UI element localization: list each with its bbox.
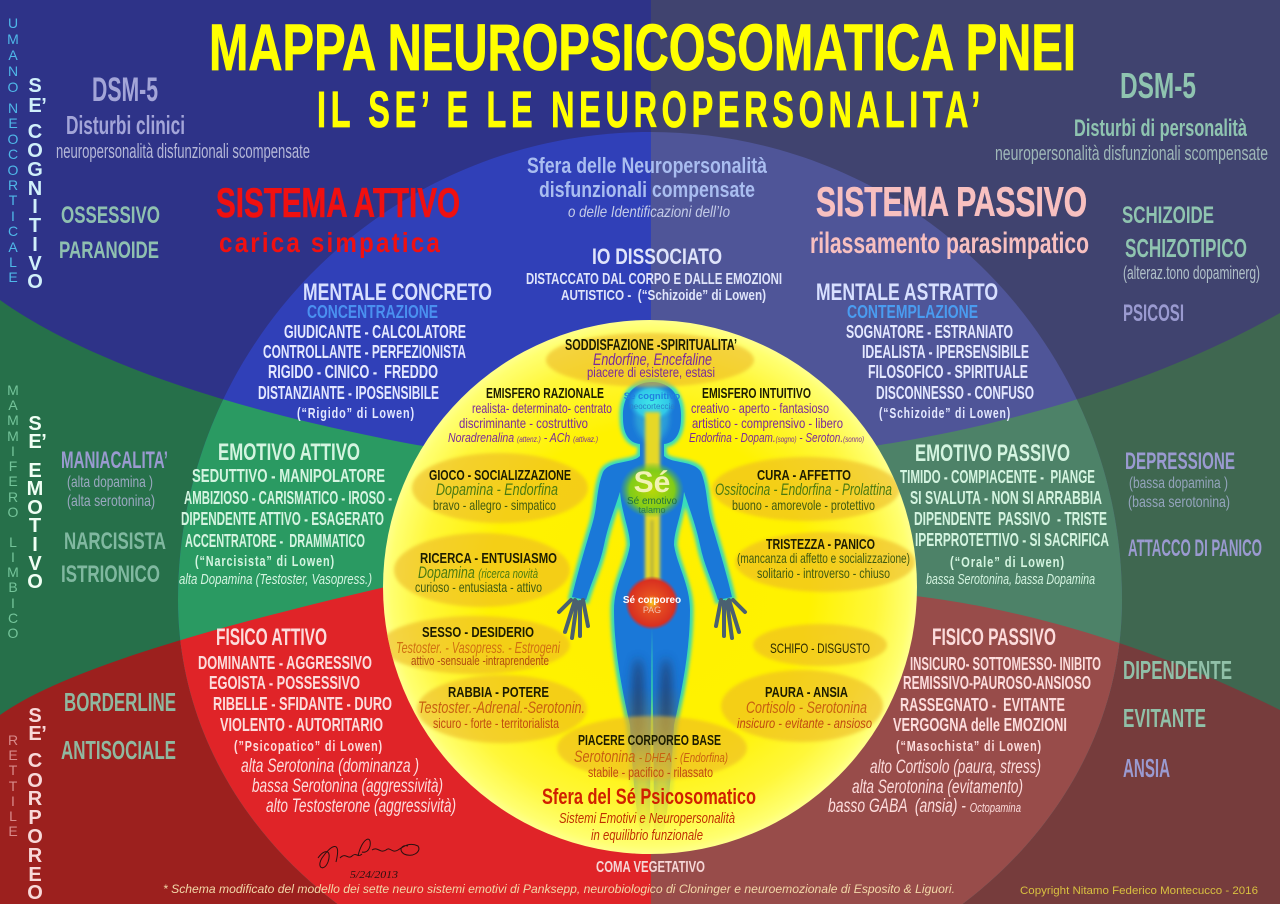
panel: emotional passive: DIPENDENTE PASSIVO - TRISTE — [914, 509, 1107, 529]
panel: mental concrete: GIUDICANTE - CALCOLATORE — [284, 322, 466, 342]
panel: emotional passive: (“Orale” di Lowen) — [950, 554, 1065, 571]
ellipse text: care: CURA - AFFETTO — [757, 467, 851, 484]
heading: sphere of neuropersonalities: Sfera delle Neuropersonalità — [527, 153, 768, 178]
centre labels: PAG — [643, 605, 661, 615]
text block: rational hemisphere: realista- determinato- centrato — [472, 400, 612, 416]
panel: emotional active: SEDUTTIVO - MANIPOLATORE — [192, 466, 385, 486]
ellipse text: care: Ossitocina - Endorfina - Prolattina — [715, 480, 892, 499]
panel: mental abstract — [816, 279, 1034, 422]
ellipse text: basic bodily pleasure: PIACERE CORPOREO BASE — [578, 732, 721, 749]
ellipse text: seeking — [415, 550, 557, 595]
text block: intuitive hemisphere: EMISFERO INTUITIVO — [702, 385, 811, 402]
heading: sphere of the psychosomatic self: in equilibrio funzionale — [591, 827, 703, 844]
centre labels: Sé — [634, 466, 670, 499]
signature — [318, 839, 419, 881]
vertical label: emotional self — [7, 382, 47, 641]
centre labels: Sé cognitivo — [624, 391, 680, 402]
panel: physical active: VIOLENTO - AUTORITARIO — [220, 715, 383, 735]
heading: sphere of neuropersonalities: o delle Identificazioni dell’Io — [568, 204, 730, 221]
panel: sphere of dysfunctional neuropersonalities — [178, 132, 1122, 904]
list: cognitive personality disorders: PSICOSI — [1123, 300, 1184, 327]
ellipse text: sadness: solitario - introverso - chiuso — [757, 565, 890, 581]
text block: dissociated self — [526, 244, 782, 304]
list: emotional clinical disorders: NARCISISTA — [64, 528, 166, 555]
panel: clinical disorders heading: DSM-5 — [92, 71, 158, 109]
panel: physical passive: (“Masochista” di Lowen) — [896, 738, 1042, 755]
ellipse text: sadness — [737, 536, 910, 581]
list: physical clinical disorders: BORDERLINE — [64, 687, 176, 717]
heading: sphere of the psychosomatic self: Sfera del Sé Psicosomatico — [542, 784, 756, 809]
ellipse text: fear: insicuro - evitante - ansioso — [737, 715, 872, 731]
ellipse text: seeking: RICERCA - ENTUSIASMO — [420, 550, 557, 567]
panel: physical active: DOMINANTE - AGGRESSIVO — [198, 653, 372, 673]
ellipse text: satisfaction: Endorfine, Encefaline — [593, 350, 712, 369]
panel: physical active: (”Psicopatico” di Lowen) — [234, 738, 383, 755]
panel: clinical disorders heading: Disturbi clinici — [66, 110, 185, 140]
title — [209, 10, 1076, 138]
list: emotional clinical disorders — [61, 447, 168, 588]
list: physical personality disorders: ANSIA — [1123, 753, 1170, 783]
panel: physical active: FISICO ATTIVO — [216, 624, 327, 651]
ellipse text: play: GIOCO - SOCIALIZZAZIONE — [429, 467, 571, 484]
heading: active system: carica simpatica — [219, 227, 442, 258]
panel: mental concrete: (“Rigido” di Lowen) — [297, 405, 415, 422]
list: emotional personality disorders — [1125, 448, 1262, 562]
text block: intuitive hemisphere: artistico - comprensivo - libero — [692, 415, 843, 431]
text block: intuitive hemisphere: Endorfina - Dopam.(sogno) - Seroton.(sonno) — [689, 430, 864, 445]
ellipse text: sex: attivo -sensuale -intraprendente — [411, 653, 549, 668]
panel: mental abstract: MENTALE ASTRATTO — [816, 279, 998, 306]
heading: sphere of the psychosomatic self — [542, 784, 756, 844]
ellipse text: seeking: Dopamina (ricerca novità — [418, 563, 538, 582]
panel: emotional active — [179, 439, 392, 588]
panel: mental concrete: MENTALE CONCRETO — [303, 279, 492, 306]
list: emotional clinical disorders: (alta serotonina) — [67, 493, 155, 510]
ellipse text: fear: PAURA - ANSIA — [765, 684, 848, 701]
ellipse text: care — [715, 467, 892, 513]
copyright: Copyright Nitamo Federico Montecucco - 2016 — [1020, 885, 1258, 897]
panel: mental concrete: RIGIDO - CINICO - FREDDO — [268, 362, 438, 382]
panel: personality disorders heading — [995, 65, 1268, 165]
ellipse text: satisfaction: SODDISFAZIONE -SPIRITUALITA’ — [565, 337, 737, 354]
text block: dissociated self: AUTISTICO - (“Schizoide” di Lowen) — [561, 287, 766, 304]
text block: dissociated self: IO DISSOCIATO — [592, 244, 722, 269]
vertical label: emotional self: SE’ EMOTIVO — [27, 413, 47, 593]
panel: physical passive: VERGOGNA delle EMOZIONI — [893, 715, 1067, 735]
text block: rational hemisphere: EMISFERO RAZIONALE — [486, 385, 604, 402]
text block: dissociated self: DISTACCATO DAL CORPO E DALLE EMOZIONI — [526, 271, 782, 288]
panel: emotional passive: SI SVALUTA - NON SI ARRABBIA — [910, 488, 1102, 508]
panel: clinical disorders heading: neuropersonalità disfunzionali scompensate — [56, 141, 310, 163]
ellipse text: basic bodily pleasure: stabile - pacifico - rilassato — [588, 764, 713, 780]
ellipse text: fear — [737, 684, 872, 731]
list: physical clinical disorders — [61, 687, 176, 765]
list: cognitive clinical disorders — [59, 202, 160, 264]
ellipse text: play — [429, 467, 571, 513]
list: emotional clinical disorders: (alta dopamina ) — [67, 474, 153, 491]
ellipse text: care: buono - amorevole - protettivo — [732, 497, 875, 513]
ellipse text: sadness: TRISTEZZA - PANICO — [766, 536, 875, 553]
heading: active system — [216, 179, 460, 258]
label: vegetative coma: COMA VEGETATIVO — [596, 859, 705, 876]
panel: mental concrete — [258, 279, 492, 422]
list: physical personality disorders — [1123, 655, 1232, 783]
ellipse text: sex: SESSO - DESIDERIO — [422, 624, 534, 641]
text block: intuitive hemisphere: creativo - aperto - fantasioso — [691, 400, 829, 416]
centre labels: neocorteccia — [629, 402, 675, 411]
panel: emotional active: EMOTIVO ATTIVO — [218, 439, 360, 466]
ellipse text: basic bodily pleasure: Serotonina - DHEA - (Endorfina) — [574, 747, 728, 766]
vertical label: bodily self: SE’ CORPOREO — [27, 705, 47, 904]
panel: physical passive: basso GABA (ansia) - Octopamina — [828, 796, 1021, 817]
panel: mental abstract: CONTEMPLAZIONE — [847, 302, 978, 322]
list: emotional personality disorders: (bassa serotonina) — [1128, 494, 1230, 511]
panel: physical active — [198, 624, 456, 817]
panel: mental concrete: CONCENTRAZIONE — [307, 302, 438, 322]
ellipse text: anger: Testoster.-Adrenal.-Serotonin. — [418, 698, 585, 717]
heading: active system: SISTEMA ATTIVO — [216, 179, 460, 226]
panel: physical passive — [828, 624, 1101, 817]
heading: passive system — [810, 178, 1089, 260]
list: emotional clinical disorders: ISTRIONICO — [61, 561, 160, 588]
panel: mental abstract: DISCONNESSO - CONFUSO — [876, 383, 1034, 403]
list: physical clinical disorders: ANTISOCIALE — [61, 735, 176, 765]
heading: sphere of neuropersonalities: disfunzionali compensate — [539, 177, 755, 202]
text block: rational hemisphere: Noradrenalina (attenz.) - ACh (attivaz.) — [448, 430, 598, 445]
panel: physical passive: alta Serotonina (evitamento) — [852, 777, 1023, 798]
ellipse text: anger: RABBIA - POTERE — [448, 684, 549, 701]
heading: sphere of the psychosomatic self: Sistemi Emotivi e Neuropersonalità — [559, 810, 735, 827]
panel: physical active: bassa Serotonina (aggressività) — [252, 776, 443, 797]
ellipse text: play: bravo - allegro - simpatico — [433, 497, 556, 513]
centre labels: talamo — [638, 505, 666, 515]
panel: physical active: alta Serotonina (dominanza ) — [241, 756, 419, 777]
footnote: * Schema modificato del modello dei sette neuro sistemi emotivi di Panksepp, neurobiologico di Cloninger e neuroemozionale di Esposito & Liguori. — [163, 882, 955, 896]
list: cognitive clinical disorders: OSSESSIVO — [61, 202, 160, 229]
ellipse text: sex: Testoster. - Vasopress. - Estrogeni — [396, 640, 560, 657]
panel: emotional passive: IPERPROTETTIVO - SI SACRIFICA — [915, 530, 1109, 550]
panel: emotional active: (“Narcisista” di Lowen) — [195, 553, 335, 570]
centre labels: Sé emotivo — [627, 496, 677, 507]
list: cognitive personality disorders — [1122, 202, 1260, 327]
vertical label: emotional self: MAMMIFERO LIMBICO — [7, 382, 19, 641]
ellipse text: anger — [418, 684, 585, 731]
list: emotional clinical disorders: MANIACALITA’ — [61, 447, 168, 474]
ellipse text: satisfaction — [565, 337, 737, 380]
panel: physical passive: REMISSIVO-PAUROSO-ANSIOSO — [903, 673, 1091, 693]
panel: physical active: RIBELLE - SFIDANTE - DURO — [213, 694, 392, 714]
panel: physical active: EGOISTA - POSSESSIVO — [209, 673, 360, 693]
panel: physical active: alto Testosterone (aggressività) — [266, 796, 456, 817]
panel: mental concrete: DISTANZIANTE - IPOSENSIBILE — [258, 383, 439, 403]
panel: physical passive: RASSEGNATO - EVITANTE — [900, 695, 1065, 715]
panel: personality disorders heading: DSM-5 — [1120, 65, 1196, 106]
panel: emotional active: alta Dopamina (Testoster, Vasopress.) — [179, 571, 372, 588]
figure body — [572, 382, 732, 830]
ellipse text: sex — [396, 624, 560, 668]
ellipse text: disgust: SCHIFO - DISGUSTO — [770, 640, 870, 656]
panel: emotional active: ACCENTRATORE - DRAMMATICO — [185, 531, 365, 551]
panel: mental abstract: (“Schizoide” di Lowen) — [879, 405, 1011, 422]
list: physical personality disorders: EVITANTE — [1123, 703, 1206, 733]
vertical label: bodily self: RETTILE — [8, 732, 18, 839]
ellipse text: seeking: curioso - entusiasta - attivo — [415, 579, 542, 595]
vertical label: cognitive self — [7, 15, 47, 293]
list: cognitive personality disorders: SCHIZOIDE — [1122, 202, 1214, 229]
signature: 5/24/2013 — [350, 869, 399, 881]
text block: intuitive hemisphere — [689, 385, 864, 445]
vertical label: bodily self — [8, 705, 47, 904]
panel: mental concrete: CONTROLLANTE - PERFEZIONISTA — [263, 342, 466, 362]
root centre — [625, 576, 679, 630]
panel: emotional passive: bassa Serotonina, bassa Dopamina — [926, 571, 1095, 588]
panel: emotional passive: EMOTIVO PASSIVO — [915, 440, 1070, 467]
crown glow — [628, 383, 676, 423]
list: emotional personality disorders: (bassa dopamina ) — [1129, 475, 1228, 492]
ellipse text: satisfaction: piacere di esistere, estasi — [587, 364, 715, 380]
panel: emotional active: DIPENDENTE ATTIVO - ESAGERATO — [181, 509, 384, 529]
emotion ellipses — [380, 333, 915, 780]
list: cognitive clinical disorders: PARANOIDE — [59, 237, 159, 264]
leg shading — [632, 658, 672, 742]
ellipse text: anger: sicuro - forte - territorialista — [433, 715, 559, 731]
panel: physical passive: INSICURO- SOTTOMESSO- INIBITO — [910, 654, 1101, 674]
ellipse text: play: Dopamina - Endorfina — [436, 480, 558, 499]
panel: sphere of the psychosomatic self — [383, 320, 917, 854]
text block: rational hemisphere — [448, 385, 612, 445]
vertical label: cognitive self: SE’ COGNITIVO — [27, 75, 47, 293]
panel: mental abstract: FILOSOFICO - SPIRITUALE — [868, 362, 1028, 382]
ellipse text: fear: Cortisolo - Serotonina — [746, 698, 867, 717]
panel: physical passive: alto Cortisolo (paura, stress) — [870, 757, 1041, 778]
panel: physical passive: FISICO PASSIVO — [932, 624, 1056, 651]
text block: rational hemisphere: discriminante - costruttivo — [459, 415, 588, 431]
heading: sphere of neuropersonalities — [527, 153, 768, 221]
ellipse text: sadness: (mancanza di affetto e socializzazione) — [737, 550, 910, 566]
heart centre — [620, 462, 684, 518]
figure glow — [572, 382, 732, 830]
heading: passive system: SISTEMA PASSIVO — [816, 178, 1087, 225]
vertical label: cognitive self: UMANO NEOCORTICALE — [7, 15, 19, 285]
centre labels — [623, 391, 681, 615]
panel: mental abstract: IDEALISTA - IPERSENSIBILE — [862, 342, 1029, 362]
ellipse text: basic bodily pleasure — [574, 732, 728, 780]
heading: passive system: rilassamento parasimpatico — [810, 227, 1089, 260]
panel: emotional passive — [900, 440, 1109, 588]
panel: clinical disorders heading — [56, 71, 310, 163]
face shading — [635, 394, 669, 442]
panel: emotional active: AMBIZIOSO - CARISMATICO - IROSO - — [184, 488, 392, 508]
panel: emotional passive: TIMIDO - COMPIACENTE - PIANGE — [900, 467, 1095, 487]
central energy column — [645, 412, 660, 592]
illustration: human figure with three self centres — [559, 382, 745, 830]
centre labels: Sé corporeo — [623, 595, 681, 606]
hands — [559, 600, 745, 638]
panel: mental abstract: SOGNATORE - ESTRANIATO — [846, 322, 1013, 342]
